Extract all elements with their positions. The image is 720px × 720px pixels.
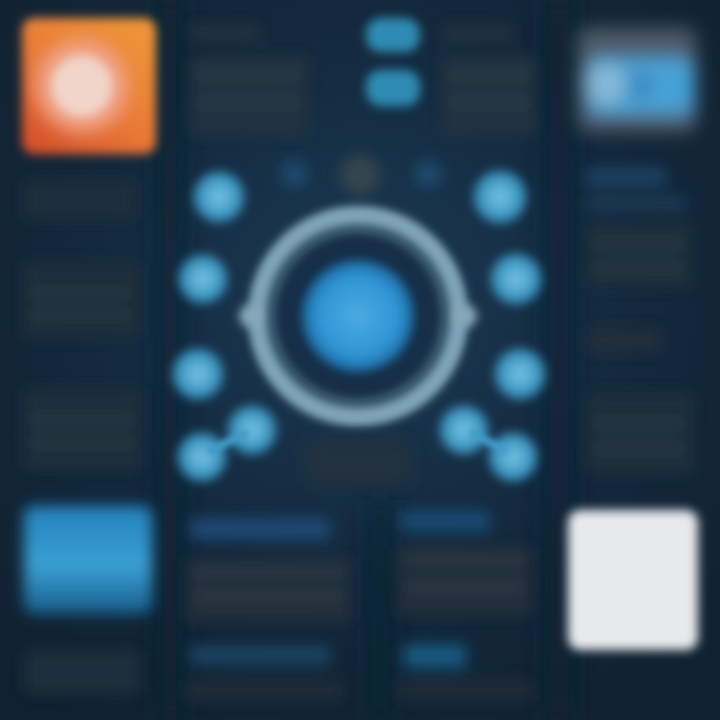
line texture: bottom centre left — [194, 568, 344, 600]
icon: left node group — [172, 171, 277, 482]
panel: bottom left blue card — [24, 506, 152, 614]
text block: left column — [24, 180, 142, 694]
text block: bottom centre right — [398, 510, 532, 702]
ring: side nodes — [239, 305, 477, 327]
connector: left lower nodes — [208, 432, 248, 452]
ring: soft glow — [250, 208, 466, 424]
icon: small top markers — [280, 155, 442, 195]
line texture: top centre right — [448, 72, 530, 106]
connector: right lower nodes — [470, 432, 508, 452]
icon: top centre twin blue pills — [366, 18, 420, 106]
ring: dark inner gap — [276, 234, 440, 398]
text block: top centre right — [442, 24, 536, 136]
line texture: bottom centre right — [406, 556, 524, 590]
label block below hub — [306, 440, 410, 486]
hub diagram — [239, 208, 477, 424]
hub: blue core — [302, 260, 414, 372]
text block: right column — [586, 168, 694, 474]
dark column bands — [160, 0, 570, 720]
line texture: right column — [592, 240, 684, 452]
text block: top centre left — [190, 24, 308, 136]
line texture: left column — [30, 290, 134, 446]
panel: top left orange icon — [22, 18, 156, 154]
panel: bottom right white card — [568, 510, 698, 650]
ring: outer halo — [257, 215, 459, 417]
icon: right node group — [439, 170, 546, 482]
text block: bottom centre left — [186, 518, 352, 702]
line texture: top centre left — [196, 72, 300, 106]
panel: top right blue image — [578, 28, 696, 132]
